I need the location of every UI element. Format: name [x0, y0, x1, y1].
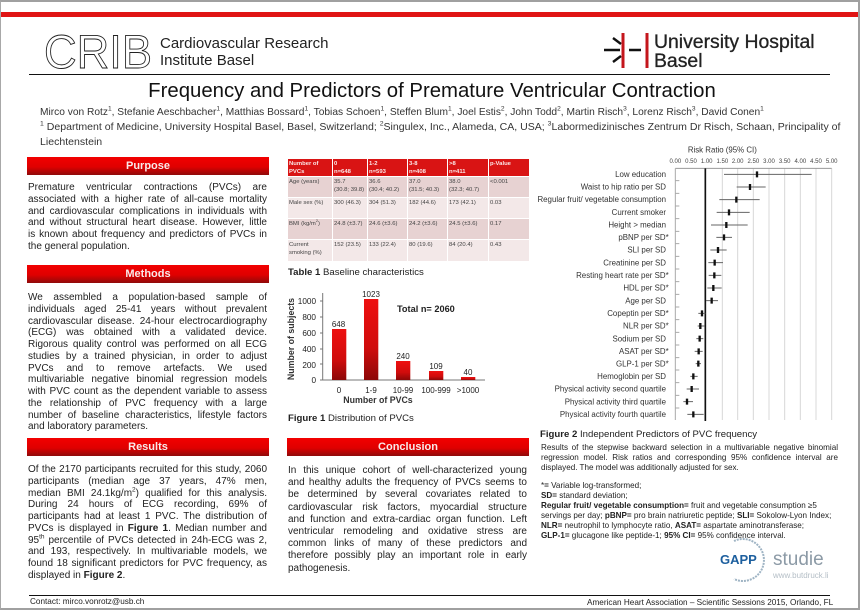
text: Purpose: and cardiovascular complications in individuals with [28, 206, 267, 216]
text: Methods: cardiovascular disease. 24-hour electrocardiography [28, 316, 267, 326]
heading: Methods: Methods [125, 268, 171, 280]
heading: Purpose: Purpose [126, 160, 170, 172]
bar chart: distribution of PVCs: 40 [464, 368, 473, 377]
table: baseline characteristics: 37.0 [409, 179, 420, 185]
text: Figure 2 description: Results of the stepwise backward selection in a multivariable negative binomial [541, 443, 838, 452]
text: Results: 95th percentile of PVCs detected in 24h-ECG was 2, [28, 533, 267, 546]
table: baseline characteristics: 80 (19.6) [409, 242, 433, 248]
forest plot: risk ratios: 1.00 [701, 159, 713, 165]
text: Methods: multivariable negative binomial regression models [28, 374, 267, 385]
text: Purpose: associated with a higher rate of all-cause mortality [28, 194, 267, 205]
institute name: Cardiovascular Research [160, 35, 328, 52]
table: baseline characteristics: n=648 [334, 169, 351, 175]
table: baseline characteristics: p-Value [490, 161, 511, 167]
forest plot: risk ratios: 4.00 [794, 159, 807, 165]
bar chart: distribution of PVCs: 400 [302, 345, 316, 354]
text: Purpose: is known about frequency and predictors of PVCs in [28, 229, 267, 240]
bar chart: distribution of PVCs: 1-9 [365, 386, 377, 395]
forest plot: risk ratios: Resting heart rate per SD* [576, 271, 669, 280]
text: abbreviations: Regular fruit/ vegetable consumption= fruit and vegetable consumption ≥5 [541, 501, 817, 510]
title: Frequency and Predictors of Premature Ventricular Contraction [148, 80, 716, 102]
bar chart: distribution of PVCs: Number of subjects [286, 298, 296, 380]
text: Conclusion [288, 465, 527, 574]
table: baseline characteristics: 0.43 [490, 242, 501, 248]
text: Methods: studies by a trained physician, in order to adjust [28, 351, 267, 362]
bar chart: distribution of PVCs: Total n= 2060 [397, 304, 455, 314]
table: baseline characteristics: 38.0 [449, 179, 460, 185]
table: baseline characteristics: BMI (kg/m2) [289, 219, 320, 227]
text: Conclusion: and healthy adults the frequency of PVCs seems to [288, 477, 527, 488]
logo: University Hospital Basel [604, 31, 815, 72]
table: baseline characteristics: Current [289, 242, 309, 248]
affiliations: 1 Department of Medicine, University Hospital Basel, Basel, Switzerland; 2Singulex, Inc., Alameda, CA, USA; 3Labormedizinisches Zentrum Dr Risch, Schaan, Principality of [40, 120, 840, 133]
forest plot: risk ratios: ASAT per SD* [619, 347, 669, 356]
forest plot: risk ratios: 4.50 [810, 159, 822, 165]
table: baseline characteristics: PVCs [289, 169, 304, 175]
text: Methods: the relationship of PVC frequency with a large [28, 398, 267, 409]
logo: University Hospital Basel: University Hospital [654, 31, 815, 53]
table: baseline characteristics: n=593 [369, 169, 386, 175]
forest plot: risk ratios [537, 146, 838, 421]
forest plot: risk ratios: Hemoglobin per SD [597, 372, 666, 381]
text: abbreviations: GLP-1= glucagone like peptide-1; 95% CI= 95% confidence interval. [541, 531, 786, 540]
table: baseline characteristics: 300 (46.3) [334, 200, 361, 206]
bar chart: distribution of PVCs: >1000 [457, 386, 480, 395]
table: baseline characteristics: >8 [449, 161, 456, 167]
table: baseline characteristics: (32.3; 40.7) [449, 187, 479, 193]
forest plot: risk ratios: SLI per SD [627, 246, 666, 255]
bar chart: distribution of PVCs: 240 [396, 352, 410, 361]
text: abbreviations: *= Variable log-transformed; [541, 481, 641, 490]
text: Methods: individuals aged 25-41 years without prevalent [28, 304, 267, 315]
forest plot: risk ratios: Waist to hip ratio per SD [581, 183, 666, 192]
table: baseline characteristics: Number of [289, 161, 318, 167]
text: Figure 2 description [541, 443, 838, 472]
bar chart: distribution of PVCs: 100-999 [421, 386, 451, 395]
table: baseline characteristics: 304 (51.3) [369, 200, 396, 206]
text: abbreviations [541, 481, 831, 540]
text: Results: Of the 2170 participants recruited for this study, 2060 [28, 464, 267, 475]
bar chart: distribution of PVCs: 600 [302, 329, 316, 338]
text: Conclusion: common links of many of these predictors and [288, 538, 527, 549]
heading: Purpose [27, 157, 269, 175]
bar chart: distribution of PVCs: 1000 [298, 297, 316, 306]
text: Purpose: and without structural heart disease. However, little [28, 217, 267, 228]
table: baseline characteristics: n=411 [449, 169, 466, 175]
forest plot: risk ratios: Physical activity third quartile [565, 397, 667, 406]
bar chart: distribution of PVCs: 0 [337, 386, 342, 395]
institute name: Institute Basel [160, 52, 254, 69]
text: Methods: We assembled a population-based sample of [28, 292, 267, 303]
text: Results: PVCs is displayed in Figure 1. Median number and [28, 523, 267, 534]
text: abbreviations: servings per day; pBNP= pro brain natriuretic peptide; SLI= Sokolow-Lyon Index; [541, 511, 831, 520]
table: baseline characteristics: 24.5 (±3.6) [449, 221, 477, 227]
table: baseline characteristics: 24.6 (±3.6) [369, 221, 397, 227]
forest plot: risk ratios: 5.00 [826, 159, 838, 165]
authors: Mirco von Rotz1, Stefanie Aeschbacher1, Matthias Bossard1, Tobias Schoen1, Steffen Blum1, Joel Estis2, John Todd2, Martin Risch3, Lorenz Risch3, David Conen1 [40, 106, 764, 118]
forest plot: risk ratios: 0.00 [669, 159, 682, 165]
logo: GAPP studie: www.butdruck.li [773, 571, 829, 580]
forest plot: risk ratios: Regular fruit/ vegetable consumption [537, 195, 666, 204]
text: Purpose: the general population. [28, 241, 130, 252]
table: baseline characteristics: 133 (22.4) [369, 242, 396, 248]
text: Results: found 18 significant predictors for PVC frequency, as [28, 558, 267, 569]
table: baseline characteristics: (30.8; 39.8) [334, 187, 364, 193]
forest plot: risk ratios: Creatinine per SD [603, 258, 666, 267]
bar chart: distribution of PVCs: 800 [302, 313, 316, 322]
forest plot: risk ratios: Current smoker [612, 208, 666, 217]
text: Methods: (ECG) was obtained with a validated device. [28, 327, 267, 338]
text: Figure 2 description: regression model. Risk ratios and corresponding 95% confidence interval are [541, 453, 838, 462]
footer rule [29, 595, 830, 596]
text: Results: and 193, respectively. In multivariable models, we [28, 546, 267, 557]
contact: Contact: mirco.vonrotz@usb.ch [30, 597, 144, 606]
bar chart: distribution of PVCs: 200 [302, 361, 316, 370]
text: Conclusion: be determined by several covariates related to [288, 489, 527, 500]
forest plot: risk ratios: Height > median [608, 221, 666, 230]
text: Purpose [28, 182, 267, 252]
table: baseline characteristics: 24.2 (±3.6) [409, 221, 437, 227]
forest plot: risk ratios: Low education [615, 170, 666, 179]
forest plot: risk ratios: Sodium per SD [612, 334, 666, 343]
bar chart: distribution of PVCs: 109 [429, 362, 443, 371]
heading: Conclusion [287, 438, 529, 456]
heading: Results: Results [128, 441, 168, 453]
table: baseline characteristics: (31.5; 40.3) [409, 187, 439, 193]
table: baseline characteristics: 84 (20.4) [449, 242, 473, 248]
text: Conclusion: pathogenesis. [288, 562, 350, 574]
table: baseline characteristics: n=408 [409, 169, 426, 175]
forest plot: risk ratios: HDL per SD* [623, 284, 669, 293]
text: Methods: PVCs and to remove artefacts. We used [28, 362, 267, 374]
text: Conclusion: In this unique cohort of well-characterized young [288, 465, 527, 476]
table: baseline characteristics: 0.17 [490, 221, 501, 227]
forest plot: risk ratios: GLP-1 per SD* [616, 360, 669, 369]
text: Results: median BMI 24.1kg/m2) qualified for this analysis. [28, 486, 267, 498]
bar chart: distribution of PVCs: Number of PVCs [343, 395, 413, 405]
affiliations: Liechtenstein [40, 136, 102, 148]
logo: University Hospital Basel: Basel [654, 50, 703, 72]
text: abbreviations: NLR= neutrophil to lymphocyte ratio, ASAT= aspartate aminotransferase; [541, 521, 804, 530]
table: baseline characteristics: 0.03 [490, 200, 501, 206]
table: baseline characteristics: 1-2 [369, 161, 378, 167]
table: baseline characteristics: 3-8 [409, 161, 418, 167]
logo: GAPP studie: studie [773, 549, 824, 570]
forest plot: risk ratios: NLR per SD* [623, 322, 669, 331]
forest plot: risk ratios: Physical activity fourth quartile [560, 410, 667, 419]
text: Results [28, 464, 268, 581]
forest plot: risk ratios: Physical activity second quartile [555, 385, 667, 394]
forest plot: risk ratios: 2.00 [732, 159, 744, 165]
table: baseline characteristics: 173 (42.1) [449, 200, 476, 206]
table: baseline characteristics: 35.7 [334, 179, 345, 185]
bar chart: distribution of PVCs: 648 [332, 320, 346, 329]
text: Methods: and laboratory parameters. [28, 421, 148, 432]
table: baseline characteristics: Age (years) [289, 179, 319, 185]
text: Conclusion: ventricular remodeling and oxidative stress are [288, 526, 527, 537]
text: abbreviations: SD= standard deviation; [541, 491, 628, 500]
text: Methods [28, 292, 268, 432]
header rule [29, 74, 830, 75]
forest plot: risk ratios: 3.00 [763, 159, 775, 165]
forest plot: risk ratios: 3.50 [779, 159, 791, 165]
table: baseline characteristics: Male sex (%) [289, 200, 323, 206]
bar chart: distribution of PVCs: 10-99 [393, 386, 414, 395]
forest plot: risk ratios: Age per SD [625, 296, 666, 305]
text: Results: participants had at least 1 PVC. The distribution of [28, 511, 267, 522]
forest plot: risk ratios: Copeptin per SD* [607, 309, 669, 318]
affiliations [40, 120, 840, 148]
top red bar [1, 12, 858, 17]
bar chart: distribution of PVCs [286, 290, 485, 405]
table: baseline characteristics: 36.6 [369, 179, 380, 185]
table: baseline characteristics: 152 (23.5) [334, 242, 361, 248]
forest plot: risk ratios: pBNP per SD* [618, 233, 669, 242]
text: Conclusion: and function and extra-cardiac organ function. Left [288, 514, 527, 525]
table: baseline characteristics: 0 [334, 161, 337, 167]
text: Methods: number of baseline characteristics, lifestyle factors [28, 410, 267, 420]
text: Purpose: Premature ventricular contractions (PVCs) are [28, 182, 267, 193]
logo: GAPP studie [720, 538, 829, 582]
text: Conclusion: therefore possibly play an important role in early [288, 550, 527, 561]
table: baseline characteristics: <0.001 [490, 179, 508, 185]
institute name [160, 35, 328, 69]
forest plot: risk ratios: Risk Ratio (95% CI) [688, 146, 757, 155]
logo: GAPP studie: GAPP [720, 552, 757, 567]
caption: Figure 1: Figure 1 Distribution of PVCs [288, 413, 414, 424]
heading: Conclusion: Conclusion [378, 441, 438, 453]
text: Results: displayed in Figure 2. [28, 570, 125, 581]
table: baseline characteristics [288, 159, 529, 261]
text: Conclusion: cardiovascular risk factors, myocardial structure [288, 502, 527, 513]
bar chart: distribution of PVCs: 0 [311, 376, 316, 385]
bar chart: distribution of PVCs: 1023 [362, 290, 380, 299]
caption: Table 1: Table 1 Baseline characteristics [288, 267, 424, 278]
heading: Methods [27, 265, 269, 283]
table: baseline characteristics: (30.4; 40.2) [369, 187, 399, 193]
text: Methods: Rigorous quality control was performed on all ECG [28, 339, 267, 350]
conference note: American Heart Association – Scientific Sessions 2015, Orlando, FL [587, 598, 833, 607]
text: Methods: with PVC count as the dependent variable to assess [28, 386, 267, 397]
text: Results: participants (median age 37 years, 47% men, [28, 476, 267, 487]
table: baseline characteristics: smoking (%) [289, 250, 322, 256]
table: baseline characteristics: 182 (44.6) [409, 200, 436, 206]
heading: Results [27, 438, 269, 456]
text: Results: During 24 hours of ECG recording, 69% of [28, 499, 267, 510]
forest plot: risk ratios: 1.50 [716, 159, 729, 165]
table: baseline characteristics: 24.8 (±3.7) [334, 221, 362, 227]
text: Figure 2 description: displayed. The model was additionally adjusted for sex. [541, 463, 739, 472]
caption: Figure 2: Figure 2 Independent Predictors of PVC frequency [540, 429, 757, 440]
forest plot: risk ratios: 0.50 [685, 159, 697, 165]
forest plot: risk ratios: 2.50 [747, 159, 760, 165]
